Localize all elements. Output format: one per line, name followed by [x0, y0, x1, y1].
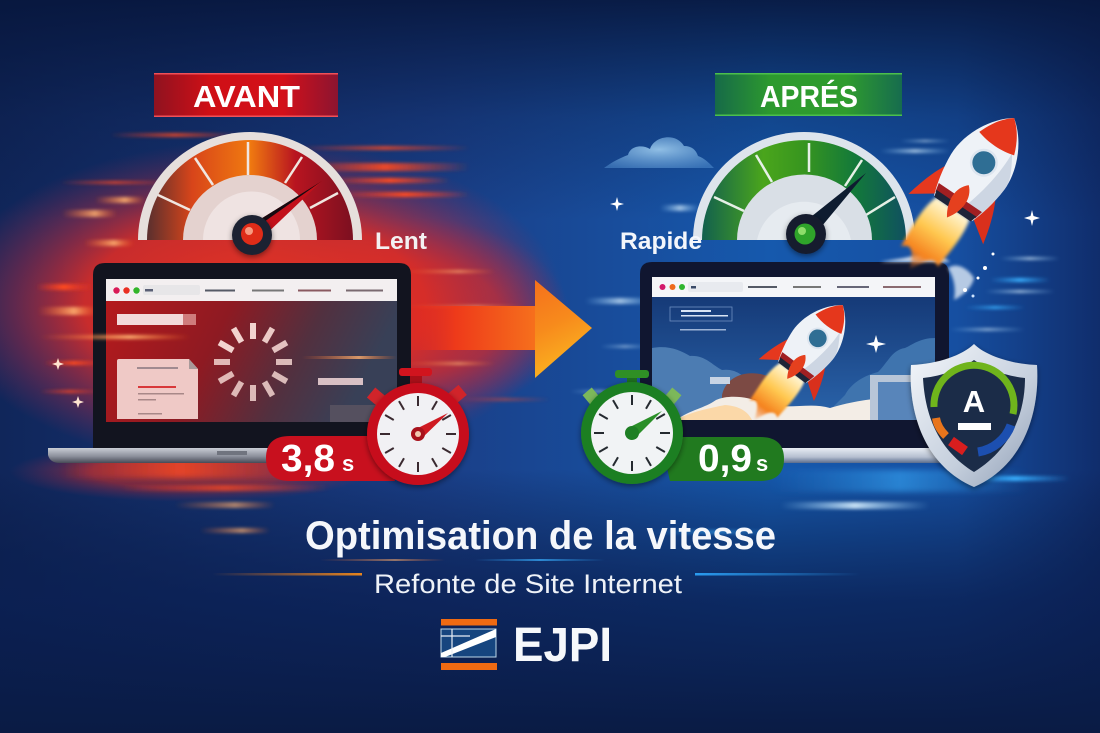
hub: [786, 214, 826, 254]
label: Rapide: Rapide: [620, 228, 702, 255]
pill: 0,9s: [660, 437, 784, 481]
secondary panel: [302, 356, 397, 359]
pill: 3,8 s: 3,8: [281, 438, 335, 480]
speed streaks: left side: [36, 133, 550, 533]
banner: APRÉS: APRÉS: [760, 79, 858, 114]
browser controls: [113, 285, 383, 295]
stopwatch: green: [581, 370, 683, 484]
shield: [911, 344, 1037, 487]
speed streaks: right side: [570, 140, 1070, 534]
banner: AVANT: [154, 73, 338, 117]
laptop: after: [630, 262, 955, 463]
exhaust smoke and sparks: [880, 250, 994, 300]
needle: [802, 173, 866, 238]
logo: EJPI: EJPI: [513, 619, 612, 672]
icon: screen star: [866, 335, 886, 353]
banner: APRÉS: [715, 73, 902, 116]
title rule lines: [212, 559, 860, 576]
score arc: [934, 365, 1014, 414]
hub: [232, 215, 272, 255]
needle: [251, 181, 322, 239]
icon: right sparkle stars: [610, 197, 1040, 226]
streak across screen: [40, 335, 190, 339]
gauge: slow: [138, 132, 362, 255]
stopwatch: red: [367, 368, 469, 485]
icon: loading spinner: [214, 323, 292, 401]
logo: EJPI: [441, 619, 612, 672]
document card: [117, 359, 198, 419]
title: Optimisation de la vitesse: [305, 514, 776, 558]
icon: screen rocket: [748, 305, 846, 420]
label: Lent: Lent: [375, 228, 427, 255]
pill: 0,9s: 0,9: [698, 438, 752, 480]
screen clouds: [652, 338, 935, 420]
arrow: [412, 280, 592, 378]
pill: 3,8 s: [266, 436, 395, 481]
logo mark: [441, 619, 497, 670]
subtitle: Refonte de Site Internet: [374, 569, 683, 599]
laptop: before: [40, 263, 415, 463]
shield: A: [963, 384, 985, 419]
icon: sparkle stars: [52, 358, 84, 408]
icon: flying rocket: [874, 93, 1051, 296]
browser controls: [660, 282, 921, 292]
form field: [117, 314, 196, 325]
icon: cloud: [604, 137, 714, 168]
banner: AVANT: AVANT: [193, 79, 300, 114]
gauge: fast: [693, 132, 915, 254]
pill: 3,8 s: s: [342, 451, 354, 476]
pill: 0,9s: s: [756, 451, 768, 476]
